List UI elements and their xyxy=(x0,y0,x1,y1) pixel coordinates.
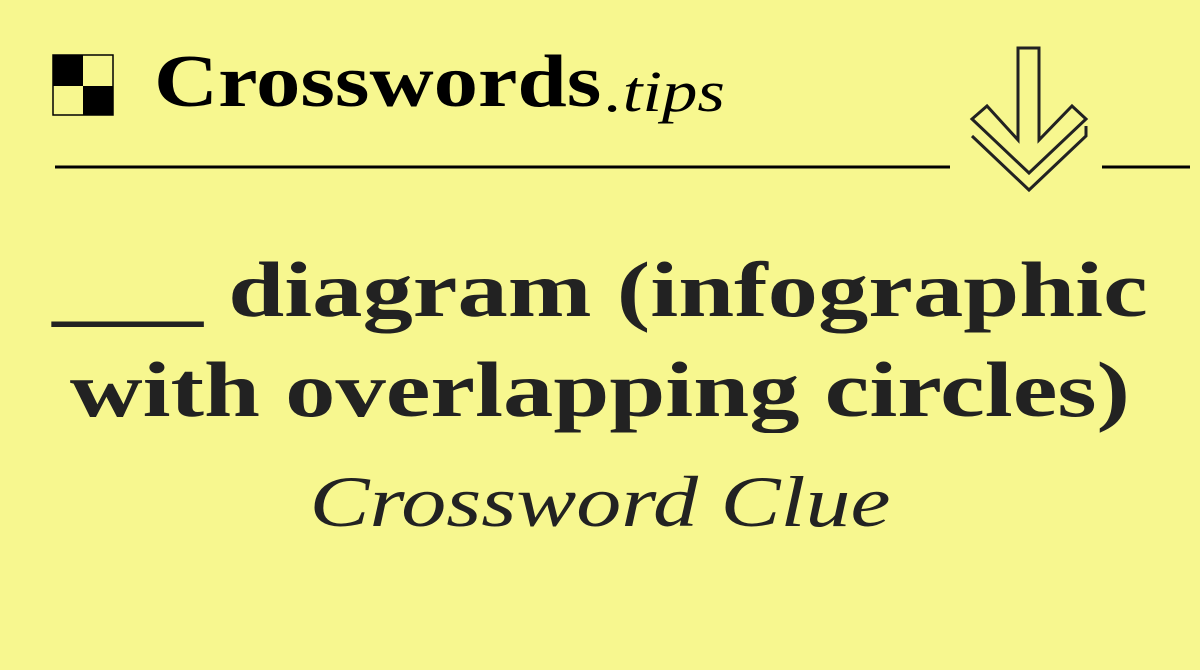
subtitle: Crossword Clue xyxy=(310,462,890,542)
title xyxy=(51,246,1148,433)
title: ___ diagram (infographic xyxy=(52,246,1148,333)
divider line with arrow xyxy=(55,46,1190,192)
logo suffix: .tips xyxy=(605,59,725,124)
logo text: Crosswords xyxy=(154,41,601,123)
title: with overlapping circles) xyxy=(70,346,1130,433)
icon: down arrow xyxy=(972,48,1086,190)
logo xyxy=(52,41,725,124)
icon: crossword grid xyxy=(52,54,114,116)
